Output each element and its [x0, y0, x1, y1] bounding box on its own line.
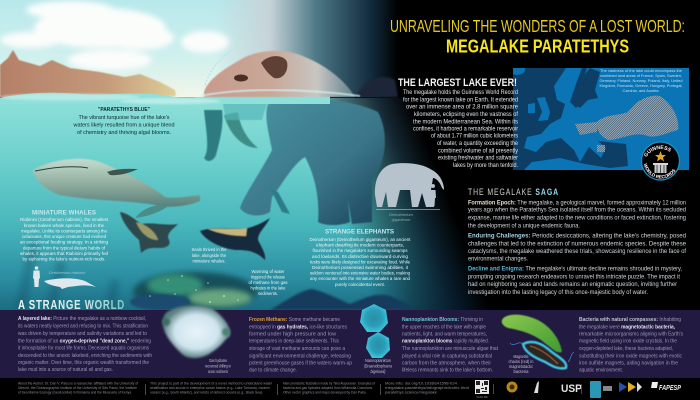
- title: [390, 16, 685, 56]
- icon: Guinness World Records badge: GUINNESS: [644, 145, 672, 156]
- illustration: magnetotactic bacteria: [502, 315, 574, 369]
- text: a layered lake: organic matter. Over time, this organic wealth transformed the: [18, 360, 150, 366]
- text: nannoplankton blooms: Nannoplankton Blooms: Thriving in: [402, 317, 483, 323]
- text: saga formation epoch: the development of a unique endemic fauna.: [468, 223, 580, 230]
- footer logos: FAPESP: [659, 385, 681, 392]
- text: nannoplankton blooms: carbon from the atmosphere, when their: [402, 361, 491, 367]
- text: a layered lake: lake mud into a source of natural oil and gas.: [18, 367, 113, 373]
- footer credits: stratification and anoxia in enterprise ocean basins (e.g., Lake Turkana), modern: [150, 386, 270, 390]
- text: a layered lake: its waters neatly layered and refusing to mix. This stratification: [18, 324, 148, 330]
- map caption: Kingdom, Romania, Greece, Hungary, Portugal,: [600, 83, 682, 88]
- footer credits: This project is part of the development of a novel method to understand water: [150, 382, 273, 386]
- text: paratethys blue: waters likely resulted from a unique blend: [73, 122, 174, 128]
- heading: the megalake saga: THE MEGALAKE SAGA: [468, 187, 559, 197]
- text: miniature whales: cetaceans, this unique creature had evolved: [22, 234, 106, 239]
- text: strange elephants: Deinotherium (Deinotherium giganteum), an ancient: [310, 237, 411, 242]
- text: largest lake body: of water, a quantity exceeding the: [437, 140, 518, 147]
- text: a layered lake: was driven by temperature and salinity variations and led to: [17, 331, 148, 337]
- illustration: whale: [33, 159, 200, 218]
- text: paratethys blue: of chemistry and thriving algal blooms.: [77, 130, 171, 136]
- text: saga formation epoch: [468, 199, 686, 230]
- caption: nannoplankton: Nannoplankton: [365, 358, 392, 363]
- caption: silhouette species: giganteum: [392, 217, 411, 222]
- text: saga enduring challenges: challenges that led to the extinction of numerous endemic species. Despite these: [468, 240, 686, 247]
- text: bacteria with natural compasses: Bacteria with natural compasses: Inhabiting: [579, 317, 681, 323]
- caption: seals: Seals thrived in the: [192, 247, 227, 252]
- text: frozen methane: due to climate change.: [249, 368, 297, 374]
- heading: the largest lake ever: THE LARGEST LAKE EVER!: [398, 77, 517, 89]
- text: saga enduring challenges: environmental changes.: [468, 256, 528, 263]
- text: saga enduring challenges: Enduring Challenges: Periodic desiccations, altering the lake's chemistry, posed: [468, 232, 686, 239]
- text: bacteria with natural compasses: iron sulfide magnets, aiding navigation in the: [579, 361, 679, 367]
- text: largest lake body: The megalake holds the Guinness World Record: [403, 89, 518, 96]
- caption: nannoplankton: [364, 358, 392, 374]
- text: largest lake body: combined volume of all presently: [438, 147, 519, 154]
- illustration: sky background: [0, 0, 398, 97]
- text: saga decline and enigma: Decline and Enigma: The megalake's ultimate decline remains shrouded in mystery,: [468, 266, 682, 273]
- caption: silhouette species: [389, 212, 414, 222]
- text: saga enduring challenges: [468, 232, 686, 263]
- text: nannoplankton blooms: nannoplankton blooms rapidly multiplied.: [402, 339, 489, 345]
- caption: gas hydrates: recovered drilling in: [205, 364, 231, 368]
- caption: magnetite chains: [508, 354, 534, 374]
- caption: warming of water: of methane from gas: [248, 280, 288, 285]
- text: nannoplankton blooms: [402, 317, 498, 374]
- caption: warming of water: [248, 269, 288, 296]
- text: largest lake body: [403, 89, 519, 169]
- illustration: mountains: [0, 50, 176, 98]
- caption: gas hydrates: Gas hydrates: [209, 358, 227, 363]
- text: largest lake body: for the largest known lake on Earth. It extended: [403, 96, 518, 103]
- text: largest lake body: over an immense area of 2.8 million square: [406, 104, 518, 111]
- heading: a strange world: A STRANGE WORLD: [18, 297, 125, 312]
- illustration: seal near whale: [120, 212, 178, 253]
- text: strange elephants: any encounter with the miniature whales a rare and: [310, 276, 410, 281]
- text: largest lake body: lakes by more than tenfold.: [453, 162, 518, 169]
- text: paratethys blue: The vibrant turquoise hue of the lake's: [78, 115, 170, 121]
- text: bacteria with natural compasses: magnetic field using iron oxide crystals. In the: [579, 339, 678, 345]
- icon: Guinness World Records badge: WORLD RECORDS: [644, 163, 676, 178]
- map caption: combined land areas of France, Spain, Sweden,: [600, 73, 682, 78]
- text: strange elephants: [310, 228, 411, 287]
- text: nannoplankton blooms: nutrients, light, and warm temperatures,: [402, 332, 487, 338]
- text: miniature whales: whales, it appears that Riabinini primarily fed: [20, 251, 108, 256]
- footer credits: Other vector graphics and maps developed by Dan Palcu.: [283, 390, 367, 394]
- illustration: reef: [130, 272, 420, 312]
- text: nannoplankton blooms: played a vital role in capturing substantial: [402, 353, 492, 359]
- caption: nannoplankton: (Braarudosphaera: [364, 364, 392, 368]
- text: bacteria with natural compasses: oxygen-depleted lake, these bacteria adapted,: [579, 346, 673, 352]
- caption: gas hydrates: [205, 358, 231, 374]
- text: saga decline and enigma: prompting ongoing research endeavors to unravel this intricate puzzle. The impact it: [468, 273, 680, 280]
- illustration: dark forest shadows in water: [20, 240, 115, 310]
- illustration: gas hydrate: [162, 306, 230, 358]
- illustration: fog fading the sky: [215, 0, 398, 97]
- text: largest lake body: the modern Mediterranean Sea. Within its: [413, 118, 518, 125]
- caption: seals: [192, 247, 227, 264]
- text: strange elephants: purely coincidental event.: [335, 282, 385, 287]
- map caption: The vastness of the lake could encompass the: [600, 68, 683, 73]
- caption: magnetite chains: bacteria: [514, 369, 529, 374]
- illustration: water background: [0, 98, 500, 312]
- text: saga decline and enigma: [468, 266, 682, 296]
- illustration: right-side dark fade: [0, 0, 700, 312]
- text: frozen methane: [249, 317, 353, 374]
- text: miniature whales: by siphoning the lake's nutrient-rich muds.: [22, 256, 106, 261]
- text: a layered lake: [17, 316, 152, 373]
- text: frozen methane: entrapped in gas hydrates, ice-like structures: [249, 324, 347, 330]
- text: frozen methane: potent greenhouse gases if the waters warm-up: [249, 361, 353, 367]
- text: nannoplankton blooms: The nannoplankton are minuscule algae that: [402, 346, 498, 352]
- illustration: giant elephant body underwater: [204, 99, 385, 225]
- caption: nannoplankton: bigelowii): [370, 369, 386, 374]
- text: strange elephants: tusks were likely designed for excavating food. While: [310, 260, 410, 264]
- text: strange elephants: Deinotherium possessed swimming abilities, it: [312, 265, 409, 270]
- text: paratethys blue: "PARATETHYS BLUE": [98, 107, 150, 113]
- text: largest lake body: of about 1.77 million cubic kilometers: [431, 133, 518, 140]
- text: nannoplankton blooms: the upper reaches of the lake with ample: [402, 324, 487, 330]
- footer credits: oceans (e.g., South Atlantic), and relicts of defunct oceans (e.g., Black Sea).: [150, 390, 263, 394]
- caption: gas hydrates: anoxic sediments: [208, 369, 228, 374]
- icon: Guinness World Records badge: [641, 142, 680, 181]
- text: nannoplankton blooms: lifeless remnants sink to the lake's bottom.: [402, 368, 493, 374]
- icon: QR code: SCAN ME: [476, 396, 488, 399]
- text: bacteria with natural compasses: aquatic environment.: [579, 368, 623, 374]
- text: frozen methane: storage of vast methane amounts can pose a: [249, 346, 346, 352]
- text: miniature whales: an exceptional feeding strategy. In a striking: [20, 240, 108, 245]
- illustration: seal swimming: [200, 218, 270, 260]
- footer credits: More info: doi.org/10.1038/s41598-024: [385, 382, 457, 386]
- text: a layered lake: the formation of an oxygen-deprived "dead zone," rendering: [18, 338, 151, 344]
- footer credits: paratethys.science/megalake: [385, 390, 437, 394]
- text: frozen methane: formed under high pressure and low: [249, 332, 337, 338]
- icon: human and small whale size comparison: Cetotherium riabinini: [49, 270, 85, 275]
- footer credits: [18, 382, 469, 395]
- panel: strange world: [0, 310, 700, 378]
- elephant size silhouette with human: [375, 163, 444, 210]
- text: a layered lake: A layered lake: Picture the megalake as a rainbow cocktail,: [18, 316, 146, 322]
- text: strange elephants: seldom ventured into extensive water bodies, making: [310, 270, 410, 276]
- text: miniature whales: departure from the typical dietary habits of: [23, 245, 106, 250]
- illustration: giant elephant head above water: [200, 50, 398, 97]
- text: saga decline and enigma: had on neighboring seas and lands remains an enigmatic question, inviting further: [468, 281, 678, 288]
- footer logos: USP: [561, 383, 582, 395]
- text: strange elephants: and lowlands. Its distinctive downward-curving: [312, 254, 408, 259]
- footer credits: bacteria and gas hydrates adapted from Wikimedia Commons.: [283, 386, 373, 390]
- title: MEGALAKE PARATETHYS: [446, 36, 629, 56]
- caption: warming of water: triggered the release: [251, 274, 285, 280]
- text: paratethys blue: [73, 107, 174, 136]
- text: frozen methane: Frozen Methane: Some methane became: [249, 317, 341, 323]
- icon: human and small whale size comparison: [33, 266, 96, 289]
- map of Europe with Paratethys extent: [513, 68, 689, 170]
- footer credits: megalake.paratethys/infographic/index.html: [385, 386, 469, 390]
- text: saga decline and enigma: investigation into the lasting legacy of this once-majestic body of water.: [468, 289, 648, 296]
- text: miniature whales: megalake. Unlike its counterparts among the: [21, 228, 107, 233]
- text: frozen methane: temperatures in deep-lake sediments. This: [249, 339, 339, 345]
- text: strange elephants: elephant dwarfing its modern counterparts,: [316, 242, 404, 248]
- caption: seals: miniature whales.: [192, 259, 226, 264]
- icon: QR code: [475, 380, 489, 399]
- caption: warming of water: hydrates in the lake: [250, 286, 286, 291]
- caption: magnetite chains: chains (red) in: [508, 359, 534, 364]
- caption: warming of water: sediments.: [258, 291, 278, 296]
- footer credits: About the Author: Dr. Dan V. Palcu is a researcher affiliated with the University of: [18, 382, 138, 386]
- text: a layered lake: it inhospitable for most life forms. Deceased aquatic organisms: [18, 346, 149, 352]
- text: miniature whales: [20, 210, 109, 261]
- footer credits: Utrecht, the Oceanographic Institute of the University of São Paulo, the Institute: [18, 386, 137, 390]
- footer credits: of Sea Marine Ecology (GeoEcoMar) in Romania and the Museums of Kenya.: [18, 390, 132, 394]
- text: miniature whales: Riabinini (Cetotherium riabinini), the smallest: [20, 217, 109, 222]
- text: miniature whales: known baleen whale species, lived in the: [24, 223, 104, 228]
- map caption: [600, 68, 683, 93]
- footer credits: Main prehistoric illustration made by Tiina Alapuranen. Examples of: [283, 382, 375, 386]
- illustration: clouds: [0, 1, 229, 70]
- text: bacteria with natural compasses: the megalake were magnetotactic bacteria,: [579, 324, 675, 330]
- map caption: Czechia, and Austria.: [622, 88, 660, 93]
- text: largest lake body: confines, it harbored a remarkable reservoir: [413, 126, 518, 132]
- illustration: nannoplankton: [360, 304, 390, 358]
- text: strange elephants: flourished in the megalake's surrounding swamps: [312, 248, 408, 253]
- text: miniature whales: MINIATURE WHALES: [32, 210, 96, 216]
- text: strange elephants: STRANGE ELEPHANTS: [325, 228, 394, 236]
- text: largest lake body: existing freshwater and saltwater: [438, 155, 518, 162]
- text: a layered lake: descended to the anoxic lakebed, enriching the sediments with: [18, 353, 152, 359]
- text: bacteria with natural compasses: [579, 317, 683, 374]
- text: bacteria with natural compasses: substituting their iron oxide magnets with exotic: [579, 353, 682, 359]
- caption: seals: lake, alongside the: [192, 253, 226, 258]
- footer logos: [493, 381, 681, 398]
- map caption: Germany, Finland, Norway, Poland, Italy, United: [600, 78, 682, 83]
- caption: magnetite chains: magnetotactic: [509, 364, 534, 369]
- caption: warming of water: Warming of water: [252, 269, 285, 274]
- text: largest lake body: kilometers, eclipsing even the vastness of: [414, 111, 518, 118]
- text: frozen methane: significant environmental challenge, releasing: [249, 353, 351, 359]
- caption: magnetite chains: Magnetite: [514, 354, 529, 359]
- illustration: water surface: [0, 93, 330, 104]
- caption: silhouette species: Deinotherium: [389, 212, 414, 217]
